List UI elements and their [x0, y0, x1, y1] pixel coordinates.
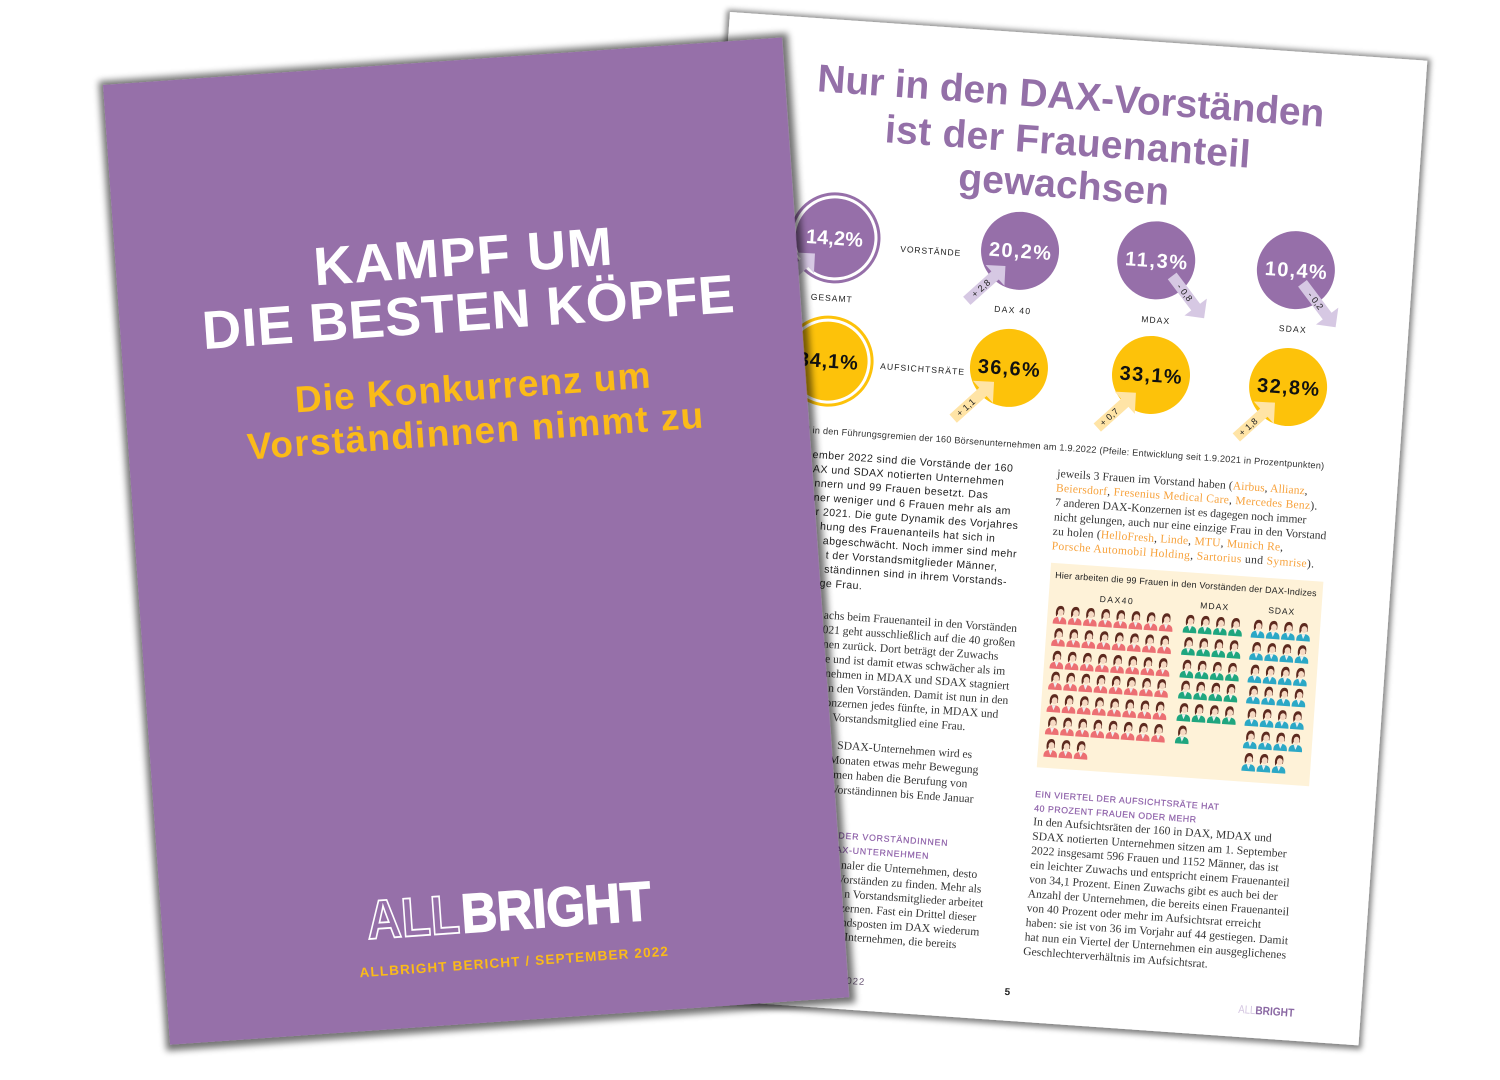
arrows: Vorstände change: - 0,8 [1175, 282, 1195, 304]
panel: purple report cover [103, 38, 849, 1045]
text block: growth paragraph: ernehmen in MDAX und SDAX stagniert [816, 666, 1011, 693]
cover subtitle: Die Konkurrenz um [294, 355, 652, 420]
labels: Vorstände row [810, 238, 1310, 336]
row: Vorstände circles: 11,3% [1124, 248, 1188, 274]
text block: growth paragraph: nen zurück. Dort beträgt der Zuwachs [823, 638, 999, 663]
arrows: Aufsichtsräte change: + 1,8 [1237, 416, 1260, 438]
text block: international paragraph: ndsposten im DAX wiederum [840, 916, 980, 939]
footer: small logo: BRIGHT [1255, 1005, 1295, 1020]
text block: company list (right column): 7 anderen DAX-Konzernen ist es dagegen noch immer [1055, 496, 1307, 526]
text block: international paragraph [832, 858, 987, 953]
panel: right report page [661, 12, 1427, 1045]
text block: intro (left column): t der Vorstandsmitglieder Männer, [825, 549, 998, 573]
text block: growth paragraph: onzernen jedes fünfte, in MDAX und [825, 696, 999, 721]
text block: intro (left column): ständinnen sind in ihrem Vorstands- [824, 564, 1007, 588]
text block: intro (left column): ember 2022 sind die Vorstände der 160 [812, 449, 1014, 475]
text block: international paragraph: zernen. Fast ein Drittel dieser [839, 901, 977, 924]
heading: Vorständinnen [827, 830, 949, 862]
row: Vorstände circles: 10,4% [1264, 258, 1328, 284]
cover title: DIE BESTEN KÖPFE [200, 264, 736, 361]
text block: growth paragraph: n den Vorständen. Damit ist nun in den [828, 682, 1009, 707]
cover subtitle [243, 351, 704, 467]
row: Vorstände circles [788, 191, 1338, 317]
footer: small logo [1238, 1004, 1295, 1020]
row: Aufsichtsräte circles: 33,1% [1119, 363, 1183, 389]
labels: Vorstände row: SDAX [1278, 323, 1306, 335]
text block: intro (left column): hung des Frauenanteils hat sich in [820, 521, 996, 545]
row: Vorstände circles: 20,2% [988, 239, 1052, 265]
text block: intro (left column): ner weniger und 6 Frauen mehr als am [813, 492, 1011, 517]
text block: international paragraph: naler die Unternehmen, desto [841, 859, 978, 881]
text block: international paragraph: Internehmen, die bereits [844, 930, 957, 951]
chart caption: il in den Führungsgremien der 160 Börsenunternehmen am 1.9.2022 (Pfeile: Entwicklung seit 1.9.2021 in Prozentpunkten) [805, 425, 1325, 471]
pictogram: SDAX women [1241, 619, 1311, 775]
AllBright logo: BRIGHT [459, 870, 653, 945]
text block: company list (right column): Porsche Automobil Holding, Sartorius und Symrise). [1051, 539, 1315, 571]
text block: Aufsichtsräte paragraph: von 40 Prozent oder mehr im Aufsichtsrat erreicht [1026, 902, 1262, 931]
row: Aufsichtsräte circles [781, 310, 1330, 440]
footer: small logo: ALL [1238, 1004, 1256, 1017]
pictogram title: Hier arbeiten die 99 Frauen in den Vorständen der DAX-Indizes [1055, 570, 1317, 598]
row: Aufsichtsräte circles: 34,1% [797, 349, 859, 375]
text block: SDAX paragraph: Monaten etwas mehr Bewegung [829, 753, 979, 776]
label: Aufsichtsräte: AUFSICHTSRÄTE [880, 361, 965, 377]
title: gewachsen [957, 156, 1170, 214]
text block: Aufsichtsräte paragraph: SDAX notierten Unternehmen sitzen am 1. September [1032, 830, 1287, 860]
heading: Vorständinnen: AX-UNTERNEHMEN [835, 844, 930, 861]
text block: SDAX paragraph: SDAX-Unternehmen wird es [837, 739, 973, 761]
labels: Vorstände row: GESAMT [810, 292, 853, 305]
text block: international paragraph: n Vorstandsmitglieder arbeitet [844, 887, 985, 910]
text block: Aufsichtsräte paragraph: Geschlechterverhältnis im Aufsichtsrat. [1023, 945, 1208, 971]
heading: Vorständinnen: E DER VORSTÄNDINNEN [828, 830, 949, 848]
text block: Aufsichtsräte paragraph: Anzahl der Unternehmen, die bereits einen Frauenanteil [1027, 887, 1290, 918]
text block: Aufsichtsräte paragraph: 2022 insgesamt 596 Frauen und 1152 Männer, das ist [1031, 844, 1280, 874]
cover title [196, 208, 736, 361]
index labels [1099, 593, 1295, 618]
arrows: Aufsichtsräte change [942, 368, 1287, 452]
text block: intro (left column): nnern und 99 Frauen besetzt. Das [814, 477, 989, 502]
text block: international paragraph: Vorständen zu finden. Mehr als [836, 873, 982, 896]
pictogram: DAX40 women [1043, 605, 1174, 765]
row: Vorstände circles: 14,2% [805, 226, 864, 252]
title: ist der Frauenanteil [884, 108, 1252, 177]
heading: Aufsichtsräte: 40 PROZENT FRAUEN ODER MEHR [1034, 803, 1197, 825]
arrows: Aufsichtsräte change: + 1,1 [955, 396, 977, 418]
text block: intro (left column) [803, 449, 1023, 603]
text block: growth paragraph: Vorstandsmitglied eine Frau. [832, 711, 966, 733]
arrows: Aufsichtsräte change: + 0,7 [1098, 406, 1121, 428]
AllBright logo: ALL [365, 883, 462, 951]
text block: SDAX paragraph: men haben die Berufung von [833, 768, 968, 790]
panel: 99 women pictogram [1037, 563, 1323, 786]
footer: page number: 5 [1004, 987, 1011, 998]
index labels: DAX40 [1099, 594, 1133, 606]
cover subtitle: Vorständinnen nimmt zu [246, 395, 704, 467]
title [810, 57, 1326, 224]
heading: Aufsichtsräte [1034, 789, 1220, 826]
index labels: SDAX [1268, 605, 1295, 617]
text block: intro (left column): AX und SDAX notierten Unternehmen [813, 463, 1005, 488]
text block: intro (left column): r 2021. Die gute Dynamik des Vorjahres [815, 506, 1019, 532]
arrows: Vorstände change: - 0,2 [1306, 290, 1325, 312]
text block: intro (left column): ge Frau. [819, 577, 863, 592]
text block: company list (right column): zu holen (HelloFresh, Linde, MTU, Munich Re, [1052, 525, 1284, 554]
report line: ALLBRIGHT BERICHT / SEPTEMBER 2022 [359, 944, 668, 980]
text block: intro (left column): abgeschwächt. Noch immer sind mehr [822, 535, 1017, 561]
text block: company list (right column): Beiersdorf, Fresenius Medical Care, Mercedes Benz). [1056, 481, 1318, 513]
text block: Aufsichtsräte paragraph: In den Aufsichtsräten der 160 in DAX, MDAX und [1033, 815, 1272, 845]
text block: company list (right column) [1051, 467, 1330, 571]
index labels: MDAX [1200, 600, 1229, 612]
footer: report date fragment: 022 [846, 976, 866, 988]
text block: growth paragraph: e und ist damit etwas schwächer als im [825, 652, 1006, 678]
labels: Vorstände row: DAX 40 [994, 304, 1031, 316]
text block: company list (right column): nicht gelungen, auch nur eine einzige Frau in den Vorstand [1054, 510, 1327, 542]
row: Aufsichtsräte circles: 32,8% [1256, 375, 1320, 401]
text block: SDAX paragraph: Vorständinnen bis Ende Januar [830, 783, 974, 806]
arrows: Vorstände change: + 2,8 [970, 277, 992, 299]
text block: growth paragraph: 021 geht ausschließlich auf die 40 großen [822, 623, 1016, 649]
text block: growth paragraph: achs beim Frauenanteil in den Vorständen [823, 609, 1018, 635]
pictogram: MDAX women [1175, 614, 1243, 747]
text block: Aufsichtsräte paragraph [1023, 815, 1296, 976]
text block: Aufsichtsräte paragraph: haben: sie ist von 36 im Vorjahr auf 44 gestiegen. Damit [1025, 916, 1289, 947]
text block: SDAX paragraph [827, 738, 980, 806]
text block: company list (right column): jeweils 3 Frauen im Vorstand haben (Airbus, Allianz, [1056, 467, 1308, 497]
arrows: Vorstände change [767, 237, 1350, 337]
cover title: KAMPF UM [312, 217, 614, 297]
text block: Aufsichtsräte paragraph: ein leichter Zuwachs und entspricht einem Frauenanteil [1030, 858, 1290, 890]
title: Nur in den DAX-Vorständen [816, 57, 1326, 136]
text block: Aufsichtsräte paragraph: von 34,1 Prozent. Einen Zuwachs gibt es auch bei der [1029, 873, 1278, 903]
labels: Vorstände row: MDAX [1141, 314, 1170, 326]
row: Aufsichtsräte circles: 36,6% [977, 356, 1041, 382]
text block: growth paragraph [813, 608, 1018, 736]
text block: Aufsichtsräte paragraph: hat nun ein Viertel der Unternehmen ein ausgeglichenes [1024, 930, 1287, 962]
labels: Vorstände row: VORSTÄNDE [900, 244, 961, 258]
AllBright logo [365, 869, 653, 951]
heading: Aufsichtsräte: EIN VIERTEL DER AUFSICHTSRÄTE HAT [1035, 789, 1220, 812]
